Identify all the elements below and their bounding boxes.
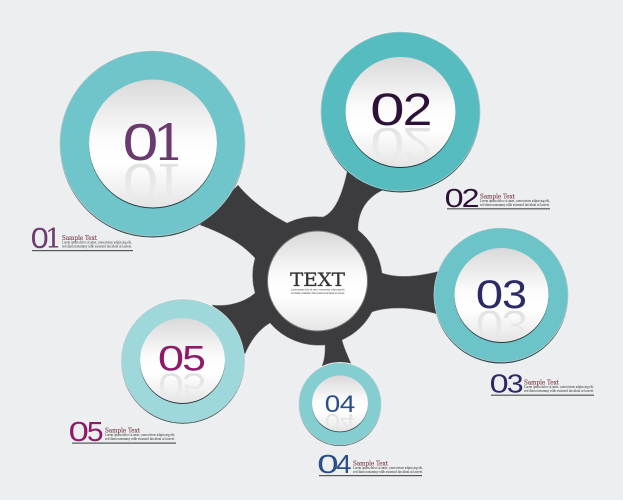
label 04: 4 bbox=[336, 449, 352, 479]
label 05: Sample Text bbox=[105, 428, 141, 434]
label 04: sed diam nonummy nibh euismod tincidunt ut laoreet. bbox=[353, 470, 423, 474]
circle 03: 0 bbox=[476, 273, 503, 317]
label 03: sed diam nonummy nibh euismod tincidunt ut laoreet. bbox=[524, 389, 594, 393]
circle 02: 2 bbox=[403, 84, 432, 135]
label 01 bbox=[31, 223, 133, 255]
label 03: 0 bbox=[490, 368, 509, 398]
circle 02 bbox=[321, 31, 480, 192]
circle 04: 4 bbox=[340, 408, 355, 435]
circle 03: 3 bbox=[502, 273, 527, 317]
connector network bbox=[200, 172, 440, 366]
circle 04: 0 bbox=[325, 391, 340, 418]
circle 05: 0 bbox=[158, 366, 184, 404]
central hub bbox=[267, 230, 368, 332]
label 04: Sample Text bbox=[353, 460, 389, 468]
central hub: TEXT bbox=[290, 269, 345, 291]
circle 05: 0 bbox=[158, 340, 184, 378]
circle 01: 1 bbox=[152, 114, 186, 172]
label 04 bbox=[317, 449, 423, 479]
central hub: Lorem ipsum dolor sit amet, consectetuer adipiscing elit, bbox=[291, 288, 345, 292]
label 02: Lorem ipsum dolor sit amet, consectetuer adipiscing elit, bbox=[480, 199, 550, 204]
label 04: 0 bbox=[317, 449, 339, 479]
label 05: sed diam nonummy nibh euismod tincidunt ut laoreet. bbox=[105, 437, 175, 441]
label 02: 0 bbox=[445, 183, 464, 213]
circle 05 bbox=[122, 298, 244, 424]
circle 02: 0 bbox=[370, 84, 405, 135]
label 03 bbox=[490, 368, 594, 398]
label 03: 3 bbox=[507, 368, 524, 398]
label 02 bbox=[445, 183, 550, 213]
circle 05: 5 bbox=[182, 366, 206, 404]
label 03: Sample Text bbox=[524, 380, 560, 386]
circle 04: 0 bbox=[325, 408, 340, 435]
label 02: Sample Text bbox=[480, 194, 516, 200]
circle 01: 0 bbox=[123, 114, 158, 172]
label 02: sed diam nonummy nibh euismod tincidunt ut laoreet. bbox=[480, 203, 550, 207]
circle 03: 3 bbox=[502, 302, 527, 346]
circle 01 bbox=[60, 50, 245, 238]
label 05: Lorem ipsum dolor sit amet, consectetuer adipiscing elit, bbox=[105, 433, 175, 438]
circle 02: 0 bbox=[370, 118, 405, 169]
label 04: Lorem ipsum dolor sit amet, consectetuer adipiscing elit, bbox=[353, 466, 423, 471]
circle 03: 0 bbox=[476, 302, 503, 346]
circle 01: 1 bbox=[152, 152, 186, 210]
label 05: 0 bbox=[69, 416, 89, 447]
circle 05: 5 bbox=[182, 340, 206, 378]
circle 01: 0 bbox=[123, 152, 158, 210]
label 01: Sample Text bbox=[62, 235, 98, 242]
central hub: sed diam nonummy nibh euismod tincidunt ut laoreet. bbox=[291, 291, 345, 295]
label 01: 0 bbox=[31, 223, 49, 255]
label 01: 1 bbox=[45, 224, 62, 255]
label 01: Lorem ipsum dolor sit amet, consectetuer adipiscing elit, bbox=[62, 240, 132, 246]
label 01: sed diam nonummy nibh euismod tincidunt ut laoreet. bbox=[62, 244, 132, 248]
label 05: 5 bbox=[87, 416, 104, 447]
label 05 bbox=[69, 416, 176, 447]
circle 02: 2 bbox=[403, 118, 432, 169]
label 02: 2 bbox=[462, 183, 480, 213]
circle 04 bbox=[299, 362, 381, 446]
circle 04: 4 bbox=[340, 391, 355, 418]
label 03: Lorem ipsum dolor sit amet, consectetuer adipiscing elit, bbox=[524, 385, 594, 390]
circle 03 bbox=[434, 227, 568, 364]
